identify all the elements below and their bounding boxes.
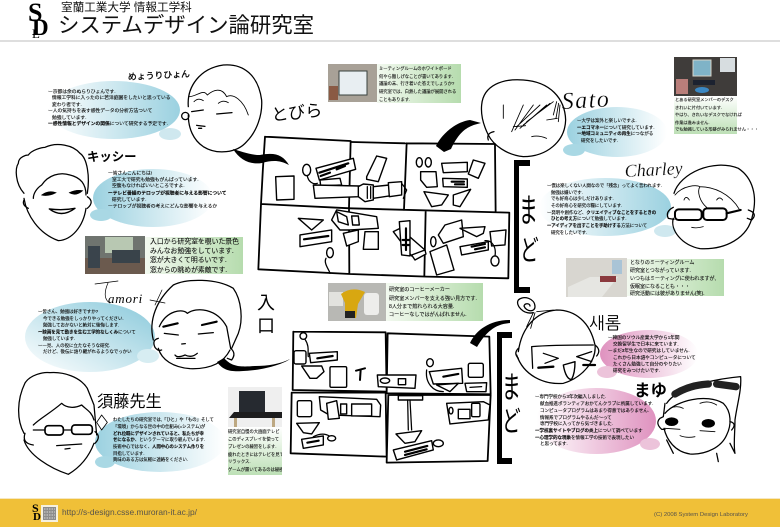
face [658,377,741,462]
header [0,0,780,42]
description text: 交換留学生で日本に来ています. [613,340,679,348]
person: Mayu [535,377,741,462]
photo caption: coffee maker [328,283,483,321]
description text: 勉強しています. [52,114,86,121]
face [16,145,91,241]
label: entrance: 入 [257,293,275,313]
description text: ーエコマネーについて研究しています. [577,125,654,130]
face [481,80,566,157]
name: 새롬 [589,314,621,333]
logo: SDL monogram [28,0,49,41]
description text: ー一見、人の役に立たなそうな研究. [38,342,110,349]
caption text: でも勉強している形跡がみられません・・・ [675,126,759,132]
name: まゆ [634,381,667,400]
description text: ー心理学的な現象を情報工学の技術で表現したい [535,435,634,440]
description text: 技術中心ではなく、人間中心のシステム作りを [113,444,204,449]
photo: TV [228,387,282,427]
description text: だけど、後伝に語り継がれるようなでっかい [43,348,132,355]
face [516,298,599,384]
description text: 変わり者です. [52,101,82,108]
speech bubble [25,302,159,372]
label: door: とびら [270,101,323,125]
caption text: 研究室とつながっています. [630,267,691,274]
person: Charley [539,158,754,249]
face [152,280,241,369]
description text: ー地域コミュニティの再生につながる [577,131,653,136]
description text: ー学校裏サイトやブログの炎上について調べています [535,428,643,433]
footer logo [32,501,41,523]
description text: と思ってます. [540,440,568,447]
arrow: Sato to plan [436,120,481,152]
description text: 研究しています. [112,196,146,203]
name: めょうりひょん [128,69,190,82]
label: window: ど [502,406,521,438]
label: entrance [257,293,275,336]
caption text: 窓が大きくて明るいです. [150,255,227,264]
caption text: やはり、きれいなデスクでなければ [675,111,743,118]
person: Sudo sensei [19,372,225,474]
description text: 研究をしたいです. [551,229,587,236]
photo caption: whiteboard [328,64,461,103]
speech bubble [563,107,667,157]
person: Tamori [25,280,290,372]
panel: entrance side floor plan [257,293,491,463]
photo: coffee maker [328,283,386,321]
description text: ー皆さん、勉強は好きですか? [38,308,99,315]
arrow: Tamori to plan [217,358,290,371]
university name: 室蘭工業大学 情報工学科 [61,0,192,14]
description text: ー皆さんこんにちは! [108,170,152,176]
caption text: このディスプレイを使って [228,436,279,442]
description text: 研究をみつけたいです. [613,367,660,374]
description text: 勉強しておかないと絶対に後悔します. [43,322,119,328]
caption text: 入口から研究室を覗いた景色 [150,236,239,246]
footer band [0,498,780,527]
speech bubble [95,412,225,472]
description text: 研究をしたいです. [581,137,618,144]
description text: どれ位既にデザインされていると、私たちが幸 [113,430,205,437]
caption text: みんなお勉強をしています. [150,246,234,255]
description text: ー韓国のソウル産業大学から1年間 [608,334,680,341]
label: entrance: 口 [257,316,275,336]
name [95,281,165,306]
logo: SDL monogram: D [32,15,49,40]
description text: でも好奇心は少しだけあります. [551,195,614,202]
name: Sato [561,86,611,115]
caption text: 窓からの眺めが素敵です. [150,265,227,274]
name: Charley [624,158,683,181]
description text: ー僕は楽しくない人間なので「残念」ってよく言われます. [547,182,662,189]
person: Kisshi [16,145,228,241]
description text: ー発明や創作など、クリエイティブなことをするときの [547,210,656,215]
photo: desk [674,57,737,96]
photo caption: big TV [228,387,285,475]
caption text: 議論の末、行き着いた答えでしょうか? [379,80,455,87]
caption text: 研究室では、白熱した議論が展開される [379,88,456,95]
arrow: Saerom to plan [470,320,510,347]
face [182,65,262,152]
copyright: (C) 2008 System Design Laboratory [654,512,748,518]
arrow: Myorihyon to plan [233,149,289,165]
caption text: リラックス. [228,459,251,465]
description text: ー映画を見て動きを生む工学的なしくみ [38,328,119,336]
caption text: となりのミーティングルーム [630,259,694,266]
description text: 情報系でプログラムやるんだ〜って [540,414,612,421]
caption text: 8人分まで煎れられる大容量. [389,303,454,310]
caption text: 疲れたときにはテレビを見て [228,451,284,458]
name: 須藤先生 [97,393,162,411]
photo: lab room [85,236,145,274]
description text: 興味のある方は気軽に連絡をください. [113,456,188,463]
description text: ー感性情報とデザインの関係 [48,120,110,127]
description text: について研究する予定です. [110,120,168,127]
photo: whiteboard [328,64,377,102]
speech bubble [536,388,660,454]
description text: ー大学は案外と楽しいですよ. [577,117,637,124]
description text: これから日本語やコンピュータについて [613,354,696,361]
description text: ーまだ3年生なので研究はしていません. [608,347,690,354]
description text: ーアイディアを出すことを手助けする方法について [547,223,647,228]
description text: ー人の気持ちを表す感性データの分析方法ついて [48,107,153,114]
floor plan: lower rooms [291,332,491,463]
lab title: システムデザイン論研究室 [58,14,314,38]
caption text: いつもはミーティングに使われますが, [630,275,716,282]
photo: meeting room [566,258,627,297]
URL: http://s-design.csse.muroran-it.ac.jp/ [62,507,198,517]
photo caption: tidy desk [674,57,759,134]
photo caption: entrance view [85,236,243,274]
caption text: きれいに片付いています. [675,104,722,111]
panel: door side floor plan [258,101,509,278]
speech bubble [48,81,181,140]
description text: ーテレビ番組のテロップが視聴者に与える影響について [108,190,227,196]
description text: 今できる勉強をしっかりやってください. [43,315,124,322]
footer logo: D [33,511,41,523]
description text: 目指しています. [113,450,144,457]
description text: 情報工学科に入ったのに若洋庭園をしたいと思っている [52,94,171,101]
person: Sato [436,80,667,157]
caption text: 研究室メンバーを支える強い見方です. [389,295,477,302]
caption text: プレゼンの練習をします. [228,443,276,450]
description text: 勉強は嫌いです. [551,189,583,196]
window bracket: lower [497,332,521,464]
caption text: コーヒーなしではがんばれません. [389,311,467,318]
caption text: 作業は進みません. [675,119,710,126]
person: Saerom [516,298,698,384]
face [667,165,754,249]
description text: その好奇心を研究の糧にしています. [551,202,622,209]
description text: ーテロップが視聴者の考えにどんな影響を与えるか [108,202,217,210]
caption text: 研究活動には彼がありません(笑). [630,290,705,297]
label: window [519,192,539,267]
description text: たくさん勉強して自分のやりたい [613,360,682,368]
caption text: 何やら難しげなことが書いてあります. [379,73,453,80]
label: window: ど [520,235,539,267]
description text: ー専門学校から3年次編入しました. [535,393,606,400]
caption text: とある研究室メンバーのデスク [675,96,734,103]
description text: について [118,330,136,336]
caption text: こともあります. [379,97,410,103]
description text: 勉強しています. [43,335,75,342]
description text: 「環境」からなる世の中の仕組み(=システム)が [113,423,206,430]
person: Myorihyon [48,65,262,152]
description text: ひとの考え方について勉強しています. [551,216,626,221]
description text: わたしたちの研究室では,「ひと」や「もの」そして [113,416,214,423]
description text: 室工大で研究も勉強もがんばっています. [112,176,199,183]
name: キッシー [87,150,137,164]
speech bubble [539,178,676,237]
caption text: ミーティングルームのホワイトボード [379,65,452,72]
floor plan: upper rooms [258,137,509,278]
caption text: 研究室自慢の大画面テレビ [228,428,280,435]
caption text: 研究室のコーヒーメーカー [389,286,450,293]
label: window: ま [519,192,538,229]
window bracket: upper [514,160,539,293]
description text: せになるか、というテーマに取り組んでいます. [113,437,205,442]
caption text: ゲームが置いてあるのは秘密 [228,466,284,473]
logo: SDL monogram: L [32,26,40,41]
QR code [41,505,58,522]
description text: 献血推進ボランティアおかてんクラブに所属しています. [540,400,653,407]
description text: コンピュータプログラムはあまり得意ではありません. [540,407,649,414]
description text: 専門学校に入ってから気づきました. [540,420,613,427]
label: window [502,371,521,438]
face [19,372,107,474]
description text: 空腹もなければいいところですよ. [112,182,185,189]
speech bubble [90,169,213,227]
footer logo: S [32,501,39,515]
label: window: ま [502,371,521,405]
name: amori [108,291,143,306]
description text: ー京都は余のぬらりひょんです. [48,88,116,95]
speech bubble [597,330,698,378]
caption text: 仮眠室になることも・・・ [630,283,690,290]
photo caption: meeting room [566,258,724,297]
